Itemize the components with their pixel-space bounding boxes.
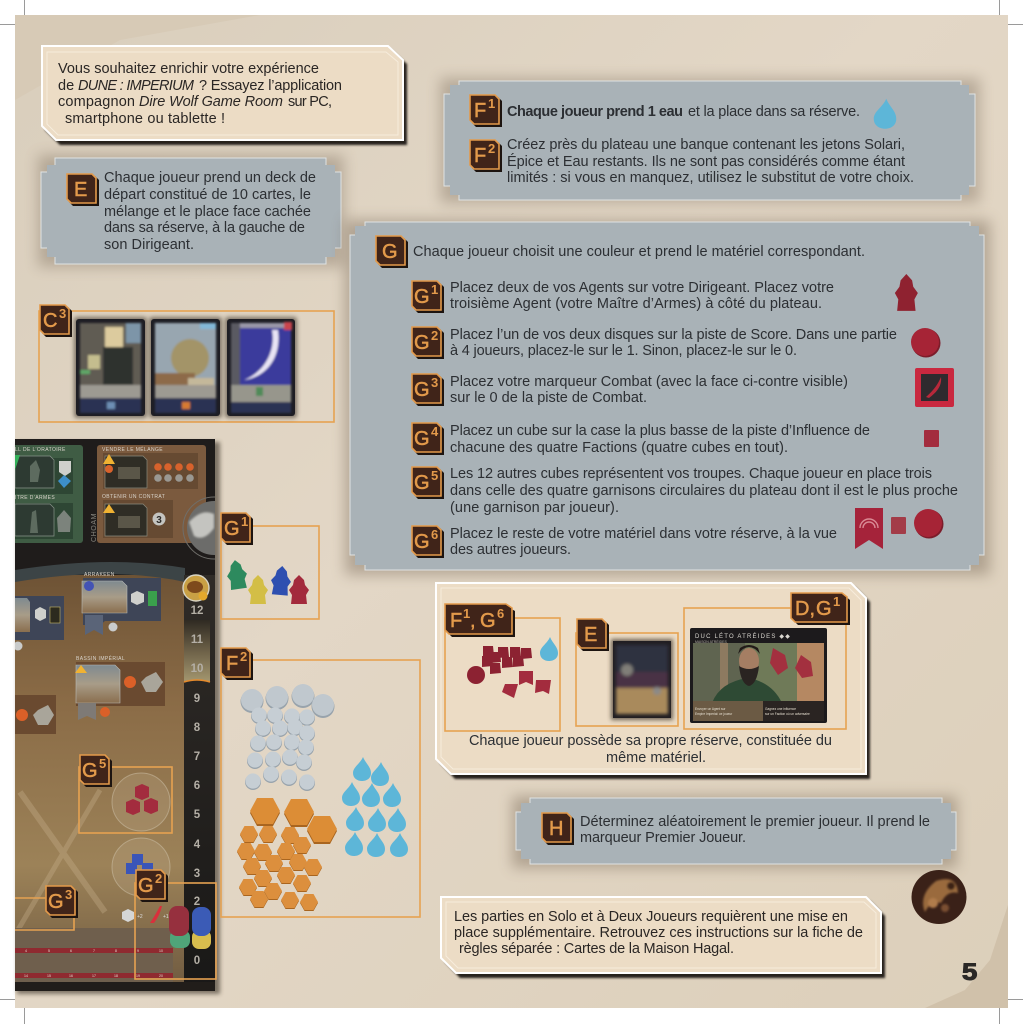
callout box: G5: G (82, 760, 98, 782)
tip text: de (58, 78, 74, 94)
deck of cards (611, 639, 673, 720)
callout: D, G1 leader: D, (795, 598, 815, 620)
curved band (15, 562, 185, 582)
badge: G3: 3 (431, 375, 438, 390)
step G6 text: Placez le reste de votre matériel dans votre réserve, à la vue (450, 526, 837, 542)
combat bonus icons: +1 (163, 914, 169, 920)
step F2 text: Épice et Eau restants. Ils ne sont pas considérés comme étant (507, 153, 905, 170)
combat track: 9 (137, 949, 139, 953)
agent pieces (225, 559, 309, 604)
callout: E deck: E (584, 624, 597, 646)
combat bonus icons (122, 906, 169, 923)
badge: G: G (382, 241, 398, 263)
badge: F2 (470, 140, 502, 172)
callout box: G3: 3 (65, 887, 72, 902)
space: Bassin Impérial (75, 655, 165, 720)
panel: CHOAM spaces: VENDRE LE MÉLANGE (102, 446, 163, 453)
badge: E (67, 174, 99, 206)
badge: F1: F (474, 100, 486, 122)
panel: CHOAM spaces: 3 (156, 515, 162, 526)
faction panel: green: LL DE L’ORATOIRE (15, 447, 66, 453)
badge: G6: G (414, 531, 430, 553)
combat track: 5 (48, 949, 50, 953)
leader card: MAISON ATRÉIDES (695, 639, 727, 644)
combat bonus icons: +2 (137, 914, 143, 920)
badge: G4 (412, 423, 444, 455)
icon: combat marker (915, 368, 954, 407)
score track: 12 (191, 605, 203, 617)
score track: 4 (194, 839, 201, 851)
game board (15, 439, 215, 991)
combat track: 7 (93, 949, 95, 953)
combat track: 19 (136, 974, 140, 978)
callout box: F2 resources (221, 648, 420, 917)
step G1 text (450, 280, 834, 312)
step G3 text: sur le 0 de la piste de Combat. (450, 390, 647, 406)
step G3 text (450, 374, 848, 406)
panel: app tip (42, 46, 407, 145)
step G text: Chaque joueur choisit une couleur et prend le matériel correspondant. (413, 244, 865, 260)
space: bottom left (15, 695, 56, 734)
score track: 7 (194, 751, 200, 763)
combat track: 6 (70, 949, 72, 953)
icon: red disc (911, 328, 940, 358)
step H text (580, 814, 930, 846)
leader card: Envoyer un Agent sur (695, 707, 726, 711)
score track: 5 (194, 809, 201, 821)
tip text: ? Essayez l’application (199, 78, 342, 94)
score track: 0 (194, 955, 200, 967)
step E text: mélange et le place face cachée (104, 204, 311, 220)
callout: D, G1 leader (684, 593, 850, 729)
panel: step G (345, 220, 990, 575)
space: Arrakeen (82, 572, 161, 635)
tip text (58, 61, 342, 127)
callout: F1, G6: 1 (463, 606, 470, 621)
score track: 8 (194, 722, 201, 734)
combat track: 8 (115, 949, 117, 953)
step G4 text (450, 423, 870, 456)
tip text: sur PC, (288, 94, 332, 110)
callout: F1, G6: G (480, 610, 496, 632)
callout box: G1 agents: 1 (241, 514, 248, 529)
badge: G3: G (414, 379, 430, 401)
spice token (183, 575, 209, 601)
badge: G6: 6 (431, 527, 438, 542)
step G6 text (450, 526, 837, 558)
badge: G2: 2 (431, 328, 438, 343)
combat track: 15 (47, 974, 51, 978)
bottom shade (15, 982, 184, 990)
badge: G4: 4 (431, 424, 439, 439)
badge: F2: 2 (488, 141, 495, 156)
note text: place supplémentaire. Retrouvez ces instructions sur la fiche de (454, 925, 863, 941)
badge: G5 (412, 467, 444, 499)
garrison: red (112, 773, 170, 831)
step H text: Déterminez aléatoirement le premier joueur. Il prend le (580, 814, 930, 830)
badge: G1 (412, 281, 444, 313)
combat track (15, 928, 173, 986)
panel: step H (512, 796, 957, 868)
callout: F1, G6: 6 (497, 606, 504, 621)
step F1 text (507, 104, 860, 120)
faction panel: green (10, 445, 83, 543)
callout: D, G1 leader: 1 (833, 594, 840, 609)
card: middle (149, 317, 222, 418)
score track: 10 (191, 663, 203, 675)
score track: 6 (194, 780, 200, 792)
callout: F1, G6: , (470, 610, 476, 632)
note text: Les parties en Solo et à Deux Joueurs requièrent une mise en (454, 909, 848, 925)
icon: red cube (924, 430, 939, 447)
callout box: G5 (79, 755, 172, 833)
score discs (169, 906, 211, 949)
badge: G5: G (414, 472, 430, 494)
board shadow (17, 442, 220, 994)
water drop (540, 637, 558, 661)
step G2 text: à 4 joueurs, placez-le sur le 1. Sinon, placez-le sur le 0. (450, 343, 797, 359)
callout box: G1 agents (221, 513, 319, 619)
combat track: 10 (159, 949, 163, 953)
icon: first player token (912, 870, 966, 924)
garrison: blue (112, 838, 170, 896)
icon: water drop (874, 99, 896, 129)
callout box: F2 resources: 2 (240, 649, 247, 664)
reserve caption: même matériel. (606, 750, 706, 766)
step E text: son Dirigeant. (104, 237, 194, 253)
callout box: G3: G (48, 891, 64, 913)
step F2 text: Créez près du plateau une banque contenant les jetons Solari, (507, 137, 905, 153)
badge: G1: 1 (431, 282, 438, 297)
page number: 5 (962, 960, 977, 986)
score track (184, 575, 215, 991)
step F2 text (507, 137, 914, 186)
score track: 11 (191, 634, 204, 646)
leader card: DUC LÉTO ATRÉIDES ◆◆ (695, 633, 791, 640)
step E text: Chaque joueur prend un deck de (104, 170, 316, 186)
faction panel: green: ITRE D’ARMES (15, 495, 55, 501)
badge: G6 (412, 526, 444, 558)
step G2 text (450, 327, 897, 359)
panel: step F (440, 78, 980, 203)
badge: C3: 3 (59, 306, 66, 321)
combat track: 20 (159, 974, 163, 978)
leader card: sur un Faction où un adversaire (765, 712, 810, 716)
step G5 text: dans celle des quatre garnisons circulaires du plateau dont il est le plus proche (450, 483, 958, 499)
panel: CHOAM spaces: OBTENIR UN CONTRAT (102, 494, 165, 500)
step G2 text: Placez l’un de vos deux disques sur la piste de Score. Dans une partie (450, 327, 897, 343)
badge: F1: 1 (488, 96, 495, 111)
score track: 2 (194, 896, 200, 908)
combat track: 14 (24, 974, 28, 978)
water tokens (342, 757, 408, 857)
badge: F2: F (474, 145, 486, 167)
badge: G3 (412, 374, 444, 406)
badge: F1 (470, 95, 502, 127)
solari tokens (240, 684, 334, 791)
step E text: départ constitué de 10 cartes, le (104, 187, 311, 203)
badge: G2: G (414, 332, 430, 354)
step F1 text: et la place dans sa réserve. (688, 104, 860, 120)
panel: C3 cards (39, 305, 334, 422)
callout box: G2 (135, 870, 216, 979)
combat track: 16 (69, 974, 73, 978)
step G3 text: Placez votre marqueur Combat (avec la face ci-contre visible) (450, 374, 848, 390)
callout box: G3 (15, 886, 78, 930)
score track: 9 (194, 693, 200, 705)
step G1 text: troisième Agent (votre Maître d’Armes) à côté du plateau. (450, 296, 822, 312)
note text (454, 909, 863, 957)
step G1 text: Placez deux de vos Agents sur votre Dirigeant. Placez votre (450, 280, 834, 296)
step G5 text: Les 12 autres cubes représentent vos troupes. Chaque joueur en place trois (450, 466, 932, 482)
panel: solo note (441, 897, 885, 978)
badge: E: E (74, 179, 87, 201)
tip text: smartphone ou tablette ! (65, 111, 225, 127)
note text: règles séparée : Cartes de la Maison Hagal. (459, 941, 734, 957)
icon: red agent (895, 274, 918, 311)
moon (182, 496, 215, 560)
space: Bassin Impérial: BASSIN IMPÉRIAL (76, 655, 125, 662)
leader card: Gagnez une influence (765, 707, 796, 711)
reserve caption (469, 733, 832, 766)
faction label: CHOAM: CHOAM (91, 513, 98, 542)
callout box: G1 agents: G (224, 518, 240, 540)
badge: G1: G (414, 286, 430, 308)
step G4 text: Placez un cube sur la case la plus basse de la piste d’Influence de (450, 423, 870, 439)
callout: D, G1 leader: G (816, 598, 832, 620)
score track: 3 (194, 868, 200, 880)
step G6 text: des autres joueurs. (450, 542, 571, 558)
space: slate left (14, 596, 64, 650)
step G5 text (450, 466, 958, 516)
callout: F1, G6: F (450, 610, 462, 632)
leader card (690, 628, 827, 723)
badge: H: H (549, 818, 563, 840)
panel: step E (38, 155, 344, 267)
step E text: dans sa réserve, à la gauche de (104, 220, 305, 236)
reserve caption: Chaque joueur possède sa propre réserve, constituée du (469, 733, 832, 749)
step G4 text: chacune des quatre Factions (quatre cubes en tout). (450, 440, 788, 456)
tip text: Dire Wolf Game Room (139, 94, 283, 110)
callout: E deck (576, 619, 678, 726)
badge: H (542, 813, 574, 845)
combat track: 17 (92, 974, 96, 978)
space: Arrakeen: ARRAKEEN (84, 572, 115, 578)
badge: G (376, 236, 408, 268)
callout box: F2 resources: F (226, 653, 238, 675)
spice tokens (237, 798, 337, 911)
step G5 text: (une garnison par joueur). (450, 500, 619, 516)
leader card: Empire Imperial: ce joueur (695, 712, 733, 716)
callout box: G2: 2 (155, 871, 162, 886)
panel: CHOAM spaces (97, 445, 206, 543)
tip text: DUNE : IMPERIUM (78, 78, 195, 94)
tip text: compagnon (58, 94, 135, 110)
panel: personal reserve (436, 583, 870, 779)
step E text (104, 170, 316, 253)
callout box: G2: G (138, 875, 154, 897)
badge: G4: G (414, 428, 430, 450)
combat track: 4 (25, 949, 27, 953)
step F1 text: Chaque joueur prend 1 eau (507, 104, 683, 120)
desert markings (15, 790, 105, 935)
red pieces (467, 646, 551, 698)
callout: F1, G6 (445, 604, 560, 731)
card: right (225, 317, 297, 418)
combat track: 18 (114, 974, 118, 978)
card: left (74, 317, 147, 418)
badge: G2 (412, 327, 444, 359)
callout box: G5: 5 (99, 756, 106, 771)
step H text: marqueur Premier Joueur. (580, 830, 746, 846)
tip text: Vous souhaitez enrichir votre expérience (58, 61, 319, 77)
badge: G5: 5 (431, 468, 438, 483)
badge: C3 (40, 305, 72, 337)
step F2 text: limités : si vous en manquez, utilisez le substitut de votre choix. (507, 170, 914, 186)
badge: C3: C (43, 310, 57, 332)
icon: reserve pieces (855, 508, 944, 549)
